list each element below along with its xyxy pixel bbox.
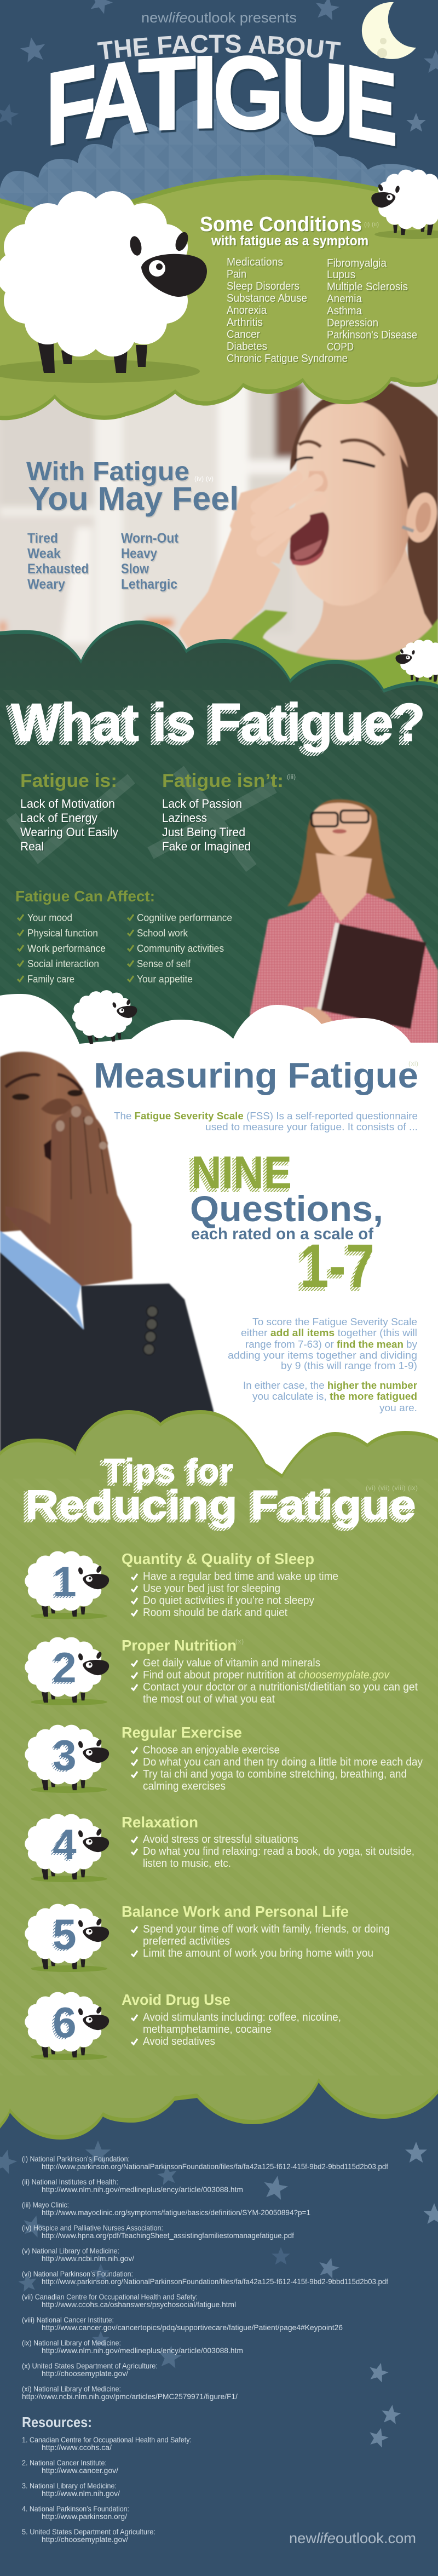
text block: resources: 2. National Cancer Institute: <box>22 2459 107 2467</box>
text block: resources: http://www.ccohs.ca/ <box>42 2443 112 2452</box>
column: fatigue isn't: Fake or Imagined <box>162 840 251 853</box>
title: fatigue: A <box>84 37 149 160</box>
tip 3: regular exercise: Do what you can and then try doing a little bit more each day <box>143 1756 423 1768</box>
ground shadow under small sheep <box>374 230 438 239</box>
conditions list: left column: Medications <box>227 256 283 268</box>
conditions list: left column: Substance Abuse <box>227 292 307 304</box>
column: fatigue is: Fatigue is: <box>20 771 117 791</box>
text block: references: (v) National Library of Medicine: <box>22 2247 119 2255</box>
heading: fatigue can affect: Fatigue Can Affect: <box>15 888 155 905</box>
heading: what is fatigue: What is Fatigue? <box>11 692 425 752</box>
heading: some conditions: Some Conditions <box>200 213 362 236</box>
feelings list: Worn-Out <box>121 531 179 546</box>
column: fatigue isn't: Lack of Passion <box>162 797 242 810</box>
conditions list: right column: COPD <box>327 341 354 353</box>
conditions list: left column: Chronic Fatigue Syndrome <box>227 353 348 365</box>
title: fatigue: I <box>192 34 218 150</box>
heading: You May Feel <box>28 480 239 517</box>
column: fatigue is: Lack of Energy <box>20 811 97 825</box>
tip 3: regular exercise: calming exercises <box>143 1780 226 1792</box>
text block: references: (ix) National Library of Medicine: <box>22 2339 121 2347</box>
panel: photo of yawning woman <box>0 378 438 712</box>
conditions list: right column: Lupus <box>327 269 355 281</box>
tip 6: avoid drug use: Avoid stimulants including: coffee, nicotine, <box>143 2011 341 2023</box>
tip 1: quantity and quality of sleep: 1 <box>50 1559 74 1607</box>
tip 1: quantity and quality of sleep: Room should be dark and quiet <box>143 1607 287 1619</box>
tip 2: proper nutrition: (x) <box>235 1638 244 1645</box>
heading: what is fatigue: What is Fatigue? <box>7 695 422 755</box>
panel: measuring fatigue white section <box>0 987 438 1479</box>
tip 2: proper nutrition: 2 <box>53 1643 77 1692</box>
footer logo url: newlifeoutlook.com <box>289 2530 416 2546</box>
tip 3: regular exercise: Choose an enjoyable exercise <box>143 1744 280 1756</box>
heading: tips for reducing fatigue: Tips for <box>101 1454 232 1492</box>
tip 6: avoid drug use: methamphetamine, cocaine <box>143 2023 272 2036</box>
text block: with fatigue you may feel <box>26 457 239 592</box>
heading: some conditions <box>200 213 368 249</box>
column: fatigue is: Real <box>20 840 44 853</box>
text block: scoring explanation: range from 7-63) or find the mean by <box>245 1338 418 1350</box>
icon: crescent moon <box>362 2 416 59</box>
text block: references: http://choosemyplate.gov/ <box>42 2370 128 2378</box>
column: fatigue is <box>20 771 118 853</box>
conditions list: left column: Arthritis <box>227 317 263 329</box>
source reference: (iv) (v) <box>194 475 214 482</box>
tip 3: regular exercise <box>25 1724 423 1793</box>
tip 5: balance work and personal life: 5 <box>53 1910 77 1958</box>
tip 2: proper nutrition: Get daily value of vitamin and minerals <box>143 1657 320 1669</box>
text block: references <box>22 2155 388 2401</box>
feelings list: Slow <box>121 561 149 577</box>
heading: tips for reducing fatigue: Reducing Fatigue <box>22 1484 414 1531</box>
source reference: (xi) <box>408 1060 418 1067</box>
conditions list: right column: Depression <box>327 317 378 329</box>
ground shadow under large sheep <box>0 360 200 383</box>
tip 3: regular exercise: 3 <box>50 1733 74 1781</box>
text block: resources: http://choosemyplate.gov/ <box>42 2535 128 2544</box>
feelings list <box>27 531 179 592</box>
feelings list: Exhausted <box>27 561 89 577</box>
tip 4: relaxation <box>25 1814 414 1882</box>
conditions list: right column <box>327 257 417 353</box>
text block: scoring explanation: you calculate is, the more fatigued <box>252 1390 417 1402</box>
photo background: blurred bookcase <box>0 378 438 712</box>
decorative stars <box>0 0 438 131</box>
source reference: (i) (ii) <box>364 221 379 228</box>
photo: man yawning with hand over mouth <box>0 1051 216 1479</box>
tip 6: avoid drug use: 6 <box>50 2000 74 2048</box>
panel: green hill with conditions list <box>0 170 438 420</box>
heading: some conditions: with fatigue as a symptom <box>211 233 368 249</box>
text block: references: http://www.cancer.gov/cancertopics/pdq/supportivecare/fatigue/Patient/page4#Keypoint26 <box>42 2324 343 2332</box>
photo: woman with book looking up <box>246 800 438 1073</box>
conditions list: right column: Parkinson's Disease <box>327 329 417 341</box>
tip 4: relaxation: 4 <box>53 1820 77 1868</box>
panel: night sky header <box>0 0 438 208</box>
callout: nine questions rated 1-7: NINE <box>191 1147 292 1198</box>
text block: references: http://www.ccohs.ca/oshanswers/psychosocial/fatigue.html <box>42 2301 236 2309</box>
text block: references: http://www.nlm.nih.gov/medlineplus/ency/article/003088.htm <box>42 2186 243 2194</box>
tip 3: regular exercise: 3 <box>53 1731 77 1779</box>
intro text: fatigue severity scale <box>114 1111 418 1132</box>
callout: nine questions rated 1-7: Questions, <box>190 1188 383 1229</box>
feelings list: Tired <box>27 531 58 546</box>
checklist: fatigue can affect: Your appetite <box>137 974 193 985</box>
white clouds background <box>0 994 438 1479</box>
text block: scoring explanation <box>228 1316 418 1413</box>
conditions list: right column: Anemia <box>327 293 362 305</box>
feelings list: Weak <box>27 546 61 561</box>
conditions list: left column: Diabetes <box>227 341 267 353</box>
title: fatigue: G <box>213 33 284 152</box>
panel: tips for reducing fatigue <box>0 1410 438 2140</box>
tip 2: proper nutrition: Proper Nutrition <box>122 1637 237 1654</box>
tip 4: relaxation: Avoid stress or stressful situations <box>143 1833 298 1845</box>
checklist: fatigue can affect: Physical function <box>27 928 98 939</box>
feelings list: Lethargic <box>121 577 177 592</box>
text block: references: (vii) Canadian Centre for Occupational Health and Safety: <box>22 2293 198 2301</box>
conditions list: left column: Cancer <box>227 329 260 341</box>
text block: scoring explanation: either add all items together (this will <box>241 1327 417 1338</box>
column: fatigue isn't: Just Being Tired <box>162 825 245 839</box>
heading: With Fatigue <box>26 457 189 486</box>
text block: references: http://www.mayoclinic.org/symptoms/fatigue/basics/definition/SYM-20050894?p=1 <box>42 2209 310 2217</box>
tip 6: avoid drug use <box>25 1991 341 2060</box>
tip 5: balance work and personal life: Balance Work and Personal Life <box>122 1903 349 1920</box>
icon: large sheep <box>0 191 207 373</box>
tip 1: quantity and quality of sleep: Quantity & Quality of Sleep <box>122 1550 314 1567</box>
title: fatigue <box>45 33 397 168</box>
text block: scoring explanation: adding your items together and dividing <box>228 1349 417 1361</box>
text block: resources <box>22 2436 192 2544</box>
icon: sheep on humps facing left <box>395 640 438 682</box>
checklist: fatigue can affect: Social interaction <box>27 958 99 969</box>
tip 4: relaxation: Relaxation <box>122 1814 198 1831</box>
text block: references: (i) National Parkinson’s Foundation: <box>22 2155 130 2163</box>
source reference: (vi) (vii) (viii) (ix) <box>366 1484 418 1492</box>
text block: references: http://www.hpna.org/pdf/TeachingSheet_assistingfamiliestomanagefatigue.pdf <box>42 2232 294 2240</box>
tip 4: relaxation: 4 <box>50 1822 74 1870</box>
conditions list: left column: Anorexia <box>227 304 267 317</box>
text block: references: (xi) National Library of Medicine: <box>22 2385 121 2393</box>
tip 2: proper nutrition <box>25 1637 418 1705</box>
tip 5: balance work and personal life: Spend your time off work with family, friends, or doing <box>143 1923 390 1935</box>
text block: scoring explanation: To score the Fatigue Severity Scale <box>252 1316 417 1327</box>
title: fatigue: F <box>45 43 97 168</box>
tip 5: balance work and personal life <box>25 1903 390 1972</box>
callout: nine questions rated 1-7: NINE <box>188 1149 290 1201</box>
text block: references: (iv) Hospice and Palliative Nurses Association: <box>22 2224 163 2232</box>
tip 6: avoid drug use: Avoid sedatives <box>143 2036 215 2048</box>
title: fatigue: E <box>345 42 397 168</box>
tip 6: avoid drug use: Avoid Drug Use <box>122 1991 230 2008</box>
title: the facts about: THE FACTS ABOUT <box>97 34 341 59</box>
text block: resources: 5. United States Department of Agriculture: <box>22 2528 155 2536</box>
text block: references: http://www.nlm.nih.gov/medlineplus/ency/article/003088.htm <box>42 2347 243 2355</box>
text block: references: http://www.ncbi.nlm.nih.gov/pmc/articles/PMC2579971/figure/F1/ <box>22 2393 238 2401</box>
tip 2: proper nutrition: Find out about proper nutrition at choosemyplate.gov <box>143 1669 390 1681</box>
tip 6: avoid drug use: 6 <box>53 1998 77 2046</box>
text block: references: (x) United States Department of Agriculture: <box>22 2362 158 2370</box>
column: fatigue is: Wearing Out Easily <box>20 825 118 839</box>
text block: references: (ii) National Institutes of Health: <box>22 2178 118 2186</box>
title: fatigue: U <box>281 36 349 159</box>
tip 1: quantity and quality of sleep <box>25 1550 338 1619</box>
checklist: fatigue can affect: Work performance <box>27 943 106 954</box>
conditions list: left column: Pain <box>227 268 246 280</box>
text block: resources: http://www.nlm.nih.gov/ <box>42 2489 120 2498</box>
text block: scoring explanation: In either case, the higher the number <box>243 1379 417 1391</box>
heading: measuring fatigue: Measuring Fatigue <box>94 1055 418 1095</box>
tip 1: quantity and quality of sleep: Use your bed just for sleeping <box>143 1583 280 1595</box>
hill background with scalloped edge <box>0 175 438 420</box>
text block: scoring explanation: you are. <box>379 1402 417 1413</box>
chalk cross mark <box>151 770 274 868</box>
checklist: fatigue can affect: Community activities <box>137 943 224 954</box>
column: fatigue isn't <box>162 771 296 853</box>
tip 3: regular exercise: Regular Exercise <box>122 1724 242 1741</box>
tip 4: relaxation: listen to music, etc. <box>143 1858 231 1870</box>
chalk check mark <box>11 779 131 855</box>
cloud behind title <box>0 99 438 241</box>
callout: nine questions rated 1-7: 1-7 <box>300 1232 374 1300</box>
feelings list: Heavy <box>121 546 157 561</box>
checklist: fatigue can affect: Sense of self <box>137 958 191 969</box>
text block: resources: http://www.cancer.gov/ <box>42 2466 118 2475</box>
column: fatigue isn't: (iii) <box>287 774 296 780</box>
tip 1: quantity and quality of sleep: Have a regular bed time and wake up time <box>143 1571 338 1583</box>
icon: small sheep facing left <box>371 170 438 235</box>
heading: tips for reducing fatigue <box>22 1452 416 1531</box>
checklist: fatigue can affect: School work <box>137 928 188 939</box>
checklist: fatigue can affect: Family care <box>27 974 74 985</box>
text block: resources: 3. National Library of Medicine: <box>22 2482 117 2490</box>
text block: resources: http://www.parkinson.org/ <box>42 2512 127 2521</box>
callout: nine questions rated 1-7: 1-7 <box>296 1234 373 1303</box>
tip 2: proper nutrition: the most out of what you eat <box>143 1693 275 1705</box>
tip 1: quantity and quality of sleep: 1 <box>53 1557 77 1606</box>
panel: footer night sky <box>0 2075 438 2576</box>
callout: nine questions rated 1-7 <box>188 1147 383 1303</box>
text block: references: http://www.parkinson.org/NationalParkinsonFoundation/files/fa/fa42a125-f612-415f-9bd2-9bbd115d2b03.pdf <box>42 2163 388 2171</box>
intro text: fatigue severity scale: used to measure your fatigue. It consists of ... <box>205 1122 418 1132</box>
text block: references: (iii) Mayo Clinic: <box>22 2201 69 2209</box>
logo line: newlifeoutlook presents: newlifeoutlook presents <box>141 9 297 26</box>
intro text: fatigue severity scale: The Fatigue Severity Scale (FSS) Is a self-reported questionnaire <box>114 1111 418 1122</box>
title: fatigue: T <box>138 34 196 153</box>
heading: resources: Resources: <box>22 2414 92 2430</box>
heading: tips for reducing fatigue: Reducing Fatigue <box>25 1482 416 1528</box>
feelings list: Weary <box>27 577 65 592</box>
tip 3: regular exercise: Try tai chi and yoga to combine stretching, breathing, and <box>143 1768 407 1780</box>
tip 4: relaxation: Do what you find relaxing: read a book, do yoga, sit outside, <box>143 1845 414 1858</box>
conditions list: left column <box>227 256 348 365</box>
heading: tips for reducing fatigue: Tips for <box>104 1452 233 1490</box>
decorative stars <box>0 2141 438 2448</box>
tip 2: proper nutrition: 2 <box>50 1645 74 1693</box>
column: fatigue isn't: Laziness <box>162 811 207 825</box>
text block: resources: 1. Canadian Centre for Occupational Health and Safety: <box>22 2436 192 2444</box>
conditions list: right column: Fibromyalgia <box>327 257 387 269</box>
tip 5: balance work and personal life: Limit the amount of work you bring home with you <box>143 1947 373 1959</box>
tip 1: quantity and quality of sleep: Do quiet activities if you’re not sleepy <box>143 1595 314 1607</box>
photo: woman yawning <box>178 383 438 695</box>
checklist: fatigue can affect: Cognitive performance <box>137 912 232 923</box>
tip 5: balance work and personal life: 5 <box>50 1912 74 1960</box>
checklist: fatigue can affect: Your mood <box>27 912 72 923</box>
tip 2: proper nutrition: Contact your doctor or a nutritionist/dietitian so you can get <box>143 1681 418 1693</box>
text block: references: (viii) National Cancer Institute: <box>22 2316 114 2324</box>
conditions list: right column: Asthma <box>327 305 362 317</box>
text block: resources: 4. National Parkinson’s Foundation: <box>22 2505 129 2513</box>
callout: nine questions rated 1-7: each rated on a scale of <box>191 1225 374 1243</box>
text block: references: (vi) National Parkinson’s Foundation: <box>22 2270 133 2278</box>
icon: sheep standing on clouds <box>70 987 140 1045</box>
checklist: fatigue can affect <box>18 912 232 985</box>
green scalloped background <box>0 1410 438 2140</box>
column: fatigue is: Lack of Motivation <box>20 797 115 810</box>
text block: references: http://www.parkinson.org/NationalParkinsonFoundation/files/fa/fa42a125-f612-415f-9bd2-9bbd115d2b03.pdf <box>42 2278 388 2286</box>
column: fatigue isn't: Fatigue isn’t: <box>162 771 284 791</box>
text block: scoring explanation: by 9 (this will range from 1-9) <box>281 1360 417 1371</box>
chalkboard background with humps <box>0 620 438 1051</box>
heading <box>26 457 239 517</box>
panel: what is fatigue chalkboard <box>0 620 438 1073</box>
tip 5: balance work and personal life: preferred activities <box>143 1935 230 1947</box>
conditions list: left column: Sleep Disorders <box>227 280 299 292</box>
text block: references: http://www.ncbi.nlm.nih.gov/ <box>42 2255 134 2263</box>
conditions list: right column: Multiple Sclerosis <box>327 281 408 293</box>
